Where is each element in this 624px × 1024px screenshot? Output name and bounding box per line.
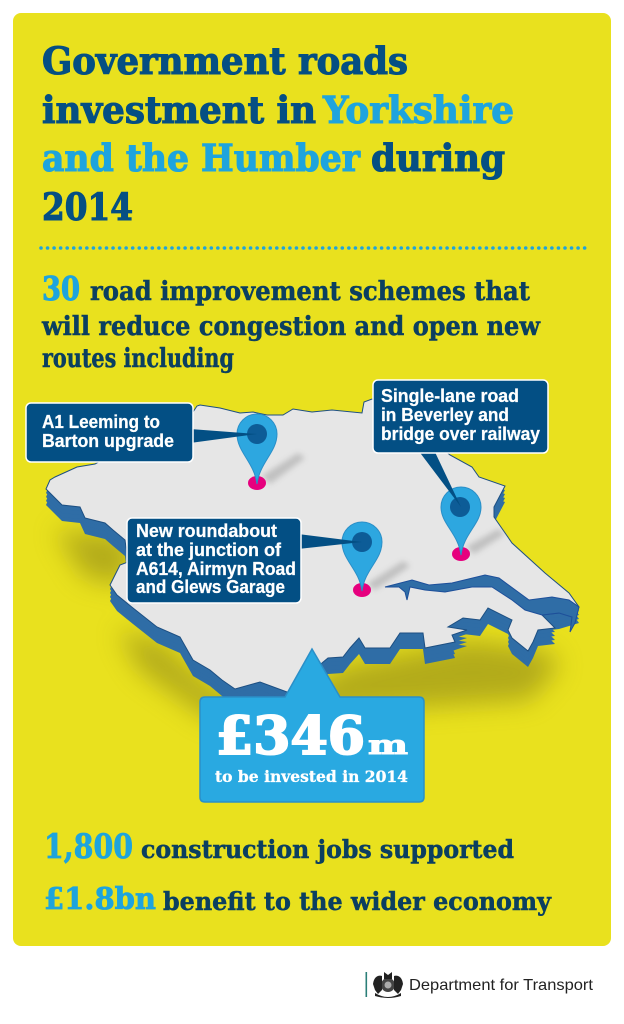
intro text: road improvement schemes: 30 — [42, 269, 80, 308]
callout: A1 Leeming to Barton upgrade — [26, 403, 257, 462]
pin: Beverley — [441, 487, 505, 561]
map of Yorkshire and the Humber — [46, 399, 579, 720]
callout: £346m investment: m — [368, 731, 408, 761]
intro text: road improvement schemes: will reduce congestion and open new — [41, 312, 541, 342]
intro text: road improvement schemes — [41, 269, 541, 374]
title: and the Humber — [42, 136, 360, 180]
Department for Transport logo — [366, 972, 594, 998]
callout: £346m investment — [200, 649, 424, 802]
title — [42, 39, 514, 229]
map shadow — [55, 530, 560, 720]
intro text: road improvement schemes: routes including — [42, 344, 234, 374]
stat: construction jobs: construction jobs supported — [141, 835, 514, 864]
stat: construction jobs — [44, 827, 514, 867]
river Humber — [385, 575, 579, 632]
icon: royal crest — [373, 972, 403, 998]
stat: wider economy benefit — [44, 882, 552, 917]
stat: wider economy benefit: benefit to the wider economy — [163, 887, 552, 916]
title: Government roads — [42, 39, 408, 83]
callout: £346m investment: to be invested in 2014 — [215, 767, 408, 786]
callout: A1 Leeming to Barton upgrade: Barton upgrade — [42, 430, 174, 451]
callout: New roundabout: and Glews Garage — [136, 576, 285, 597]
pin: A1 Leeming — [237, 414, 305, 490]
callout: A1 Leeming to Barton upgrade: A1 Leeming to — [42, 411, 160, 432]
callout: £346m investment: £346 — [216, 706, 365, 767]
Department for Transport logo: Department for Transport — [409, 977, 594, 994]
stat: wider economy benefit: £1.8bn — [44, 882, 156, 917]
title: Yorkshire — [322, 88, 514, 132]
title: 2014 — [42, 185, 133, 229]
callout: Single-lane road in Beverley — [373, 380, 548, 507]
pin: New roundabout — [342, 522, 410, 597]
stat: construction jobs: 1,800 — [44, 827, 133, 867]
callout: Single-lane road in Beverley: Single-lane road — [381, 385, 519, 406]
intro text: road improvement schemes: road improvement schemes that — [90, 277, 530, 307]
callout: New roundabout — [127, 518, 362, 603]
title: investment in — [42, 88, 316, 132]
map surface — [46, 399, 579, 692]
map extrusion — [46, 403, 579, 708]
callout: New roundabout: at the junction of — [136, 539, 282, 560]
callout: New roundabout: New roundabout — [136, 520, 277, 541]
callout: Single-lane road in Beverley: bridge over railway — [381, 423, 541, 444]
title: during — [371, 136, 505, 180]
callout: New roundabout: A614, Airmyn Road — [136, 558, 296, 579]
callout: Single-lane road in Beverley: in Beverley and — [381, 404, 509, 425]
